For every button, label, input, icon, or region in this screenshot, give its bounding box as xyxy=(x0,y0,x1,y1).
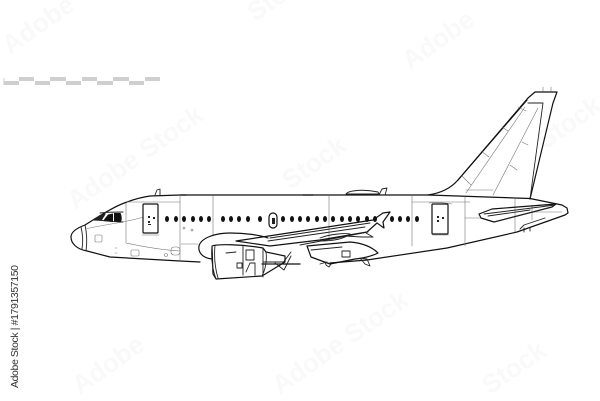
watermark pattern: Adobe xyxy=(396,4,480,75)
aft belly details xyxy=(520,218,545,232)
fuselage outline xyxy=(71,195,568,264)
cockpit windows xyxy=(93,212,123,222)
wing root fairing xyxy=(199,233,268,259)
scale bar xyxy=(4,78,160,85)
flap track fairing pod xyxy=(268,242,378,270)
passenger windows xyxy=(165,216,419,222)
engine xyxy=(212,245,285,279)
doors xyxy=(142,203,452,235)
fuselage panel lines xyxy=(86,196,562,260)
antenna fins xyxy=(155,188,387,195)
wing xyxy=(236,212,390,246)
tail fin xyxy=(428,87,557,199)
small fuselage markings xyxy=(95,227,193,256)
watermark pattern: Stock xyxy=(276,129,352,195)
watermark pattern: Adobe Stock xyxy=(266,284,414,400)
watermark pattern: Stock xyxy=(476,334,552,400)
watermark pattern: Adobe Stock xyxy=(61,99,209,215)
watermark pattern: Adobe xyxy=(66,329,150,400)
horizontal stabilizer xyxy=(479,204,556,222)
vertical stock credit: Adobe Stock | #1791357150 xyxy=(9,265,21,388)
